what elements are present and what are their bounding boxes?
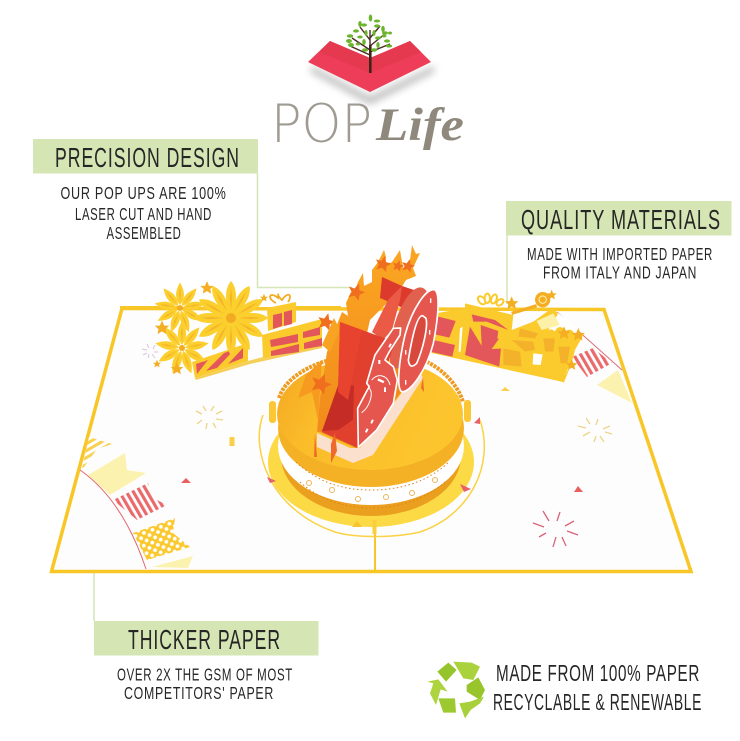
yellow starburst over gift	[492, 335, 515, 349]
lace ring ornaments	[306, 478, 438, 502]
logo wordmark	[271, 94, 464, 155]
left gift panels	[430, 317, 456, 357]
heading: PRECISION DESIGN	[55, 142, 240, 173]
logo wordmark: POP	[271, 94, 372, 155]
top edge	[437, 308, 603, 310]
champagne bottle and glasses	[503, 312, 583, 377]
pop-up strip: flowers and gifts	[120, 281, 341, 380]
interior floor	[320, 368, 418, 449]
flame tips left	[298, 360, 322, 420]
flame backing	[317, 245, 420, 432]
flower: small upper	[154, 282, 206, 333]
star on flame	[308, 370, 335, 396]
description	[60, 183, 226, 243]
left garland	[80, 437, 193, 569]
digit zero	[399, 290, 438, 392]
icon: recycling arrows	[427, 662, 485, 718]
connector: quality materials	[506, 235, 508, 304]
digit five	[358, 328, 401, 447]
logo tree	[346, 14, 392, 73]
plate centre tab	[372, 520, 376, 534]
callout: thicker paper	[94, 621, 318, 703]
base rim	[281, 396, 461, 516]
lace band	[278, 387, 464, 505]
plate	[268, 397, 474, 527]
gift bow	[476, 294, 505, 307]
lower gift	[192, 343, 322, 380]
wide gift	[262, 319, 322, 358]
small red tabs	[314, 377, 424, 463]
description	[117, 664, 293, 703]
cake side dots	[296, 462, 449, 490]
description	[527, 244, 713, 282]
cake side	[278, 369, 464, 487]
top card edge highlights	[120, 306, 180, 308]
pale base strip	[317, 370, 423, 463]
flower: large	[194, 281, 268, 355]
flower: small lower	[155, 321, 209, 375]
lace lower dots	[300, 482, 445, 508]
open pop-up card	[52, 308, 691, 572]
swirl ornament	[512, 292, 550, 313]
front red walls	[322, 322, 395, 448]
plate red markers	[267, 417, 480, 492]
callout: precision design	[33, 139, 258, 243]
five inner highlights	[362, 376, 390, 413]
birthday cake	[259, 358, 484, 536]
description: OUR POP UPS ARE 100%	[60, 183, 226, 203]
connector: precision design	[258, 173, 352, 288]
heading band	[506, 201, 732, 236]
description: COMPETITORS' PAPER	[124, 683, 274, 703]
back red block	[380, 277, 423, 316]
confetti: triangles	[181, 387, 583, 492]
stars	[153, 281, 268, 374]
confetti: fireworks	[142, 344, 612, 547]
callout: quality materials	[506, 201, 732, 282]
heading: THICKER PAPER	[128, 624, 281, 655]
back zero	[382, 283, 438, 381]
logo shadow	[311, 66, 434, 104]
number 50 pop-up	[298, 245, 438, 463]
plate ring	[259, 415, 484, 536]
connector: thicker paper	[93, 573, 95, 621]
large gift panel	[465, 314, 508, 367]
logo red open book	[308, 41, 431, 92]
centre fold	[374, 520, 376, 572]
back scalloped lace	[279, 358, 463, 402]
right garland	[557, 312, 632, 403]
description: ASSEMBLED	[106, 223, 182, 243]
heading band	[94, 621, 318, 656]
upper gift	[267, 294, 296, 331]
plate triangle	[352, 521, 362, 527]
side tabs	[269, 400, 471, 423]
heading band	[33, 139, 258, 174]
card paper and outline	[52, 308, 691, 572]
gap between gift boxes	[459, 327, 463, 352]
recycling text	[493, 660, 702, 715]
strip base	[430, 303, 583, 382]
logo wordmark: Life	[375, 99, 464, 151]
bubbles	[547, 327, 574, 339]
stars	[505, 290, 585, 370]
flame stars	[316, 254, 416, 331]
cake top	[277, 358, 463, 470]
logo	[271, 14, 464, 155]
red wall behind five	[372, 286, 402, 340]
top edge continuation	[296, 306, 341, 308]
pop-up strip: gifts and champagne	[430, 290, 603, 382]
recycling note	[427, 660, 702, 718]
description: OVER 2X THE GSM OF MOST	[117, 664, 293, 684]
description: LASER CUT AND HAND	[75, 204, 212, 224]
